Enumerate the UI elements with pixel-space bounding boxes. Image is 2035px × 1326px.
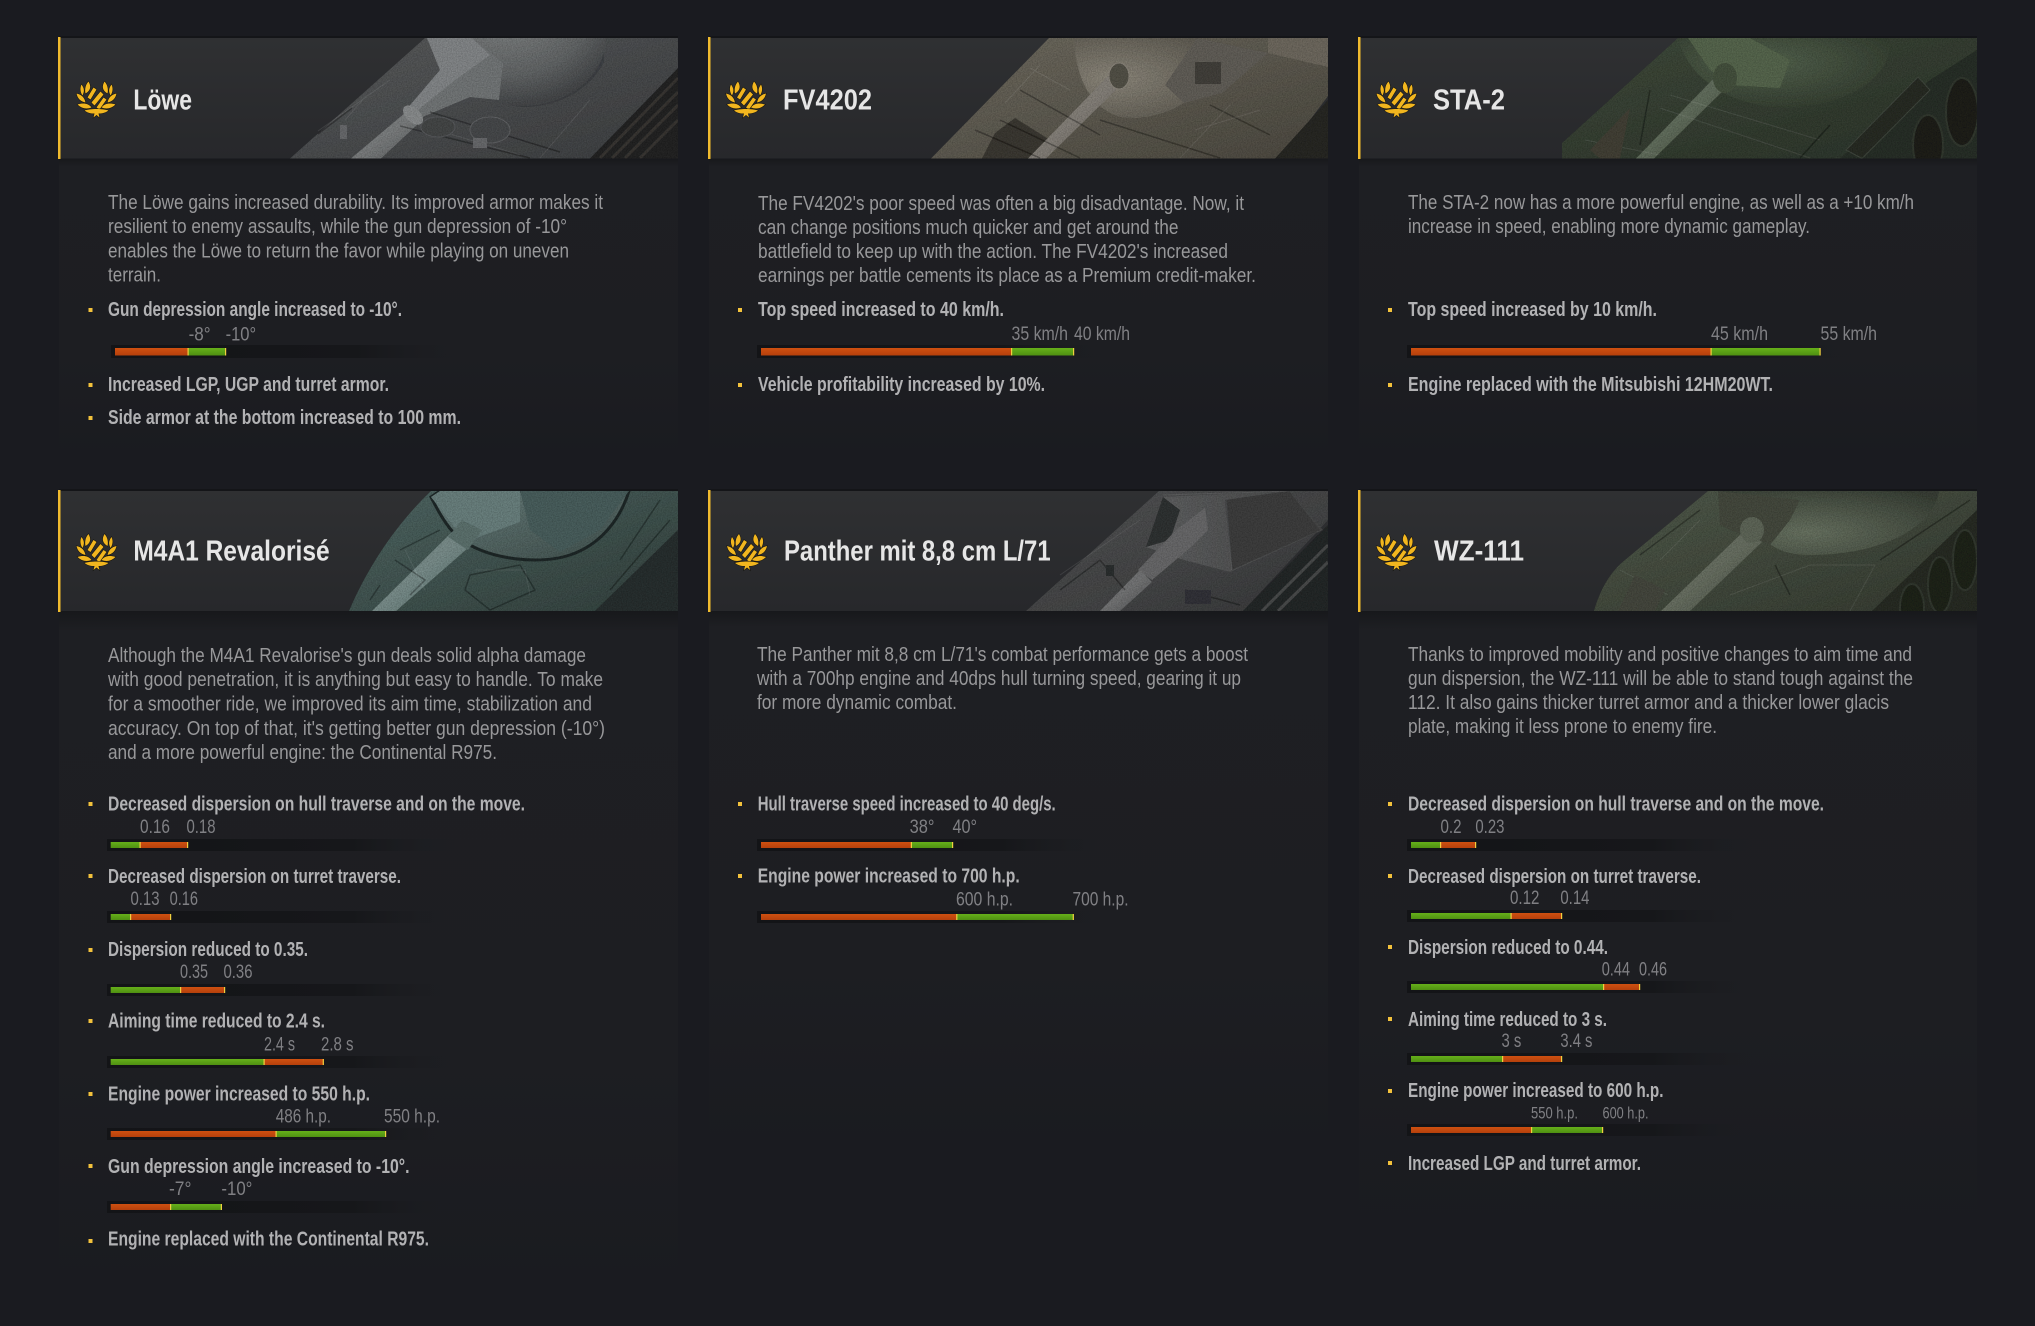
change: gun depression: -7° bbox=[169, 1179, 192, 1200]
change: hull traverse dispersion: Decreased dispersion on hull traverse and on the move. bbox=[108, 794, 525, 816]
change: gun depression: Gun depression angle increased to -10°. bbox=[108, 299, 402, 321]
icon: laurel bbox=[727, 534, 767, 570]
change: engine: Engine replaced with the Mitsubishi 12HM20WT. bbox=[1408, 374, 1773, 396]
description: battlefield to keep up with the action. The FV4202's increased bbox=[758, 241, 1228, 263]
change: turret traverse dispersion: Decreased dispersion on turret traverse. bbox=[108, 866, 401, 888]
description bbox=[756, 644, 1248, 714]
change: aiming time: Aiming time reduced to 2.4 s. bbox=[108, 1011, 325, 1033]
description: for more dynamic combat. bbox=[757, 692, 957, 714]
change: top speed: 35 km/h bbox=[1012, 324, 1068, 345]
image: WZ-111 tank bbox=[1594, 491, 1977, 611]
description bbox=[758, 193, 1256, 287]
change: engine power: Engine power increased to 550 h.p. bbox=[108, 1084, 370, 1106]
change: hull traverse dispersion bbox=[1388, 794, 1824, 851]
change: hull traverse dispersion: Decreased dispersion on hull traverse and on the move. bbox=[1408, 794, 1824, 816]
card header: WZ-111 bbox=[1358, 490, 1977, 612]
change: gun depression: -10° bbox=[226, 324, 256, 346]
image: Löwe tank bbox=[290, 38, 678, 158]
change: turret traverse dispersion: 0.16 bbox=[170, 889, 198, 910]
change: dispersion bbox=[88, 939, 457, 996]
change: dispersion: Dispersion reduced to 0.44. bbox=[1408, 937, 1608, 959]
change: hull traverse: 40° bbox=[952, 817, 977, 838]
change: engine power: 600 h.p. bbox=[1602, 1104, 1648, 1122]
change: gun depression: -10° bbox=[221, 1179, 252, 1200]
change: dispersion bbox=[1388, 937, 1757, 993]
description: earnings per battle cements its place as a Premium credit-maker. bbox=[758, 265, 1256, 287]
change: engine power: Engine power increased to 700 h.p. bbox=[758, 866, 1020, 888]
change: dispersion: 0.36 bbox=[224, 962, 252, 983]
icon: laurel bbox=[76, 82, 116, 118]
change: turret traverse dispersion: 0.12 bbox=[1510, 888, 1539, 909]
change: turret traverse dispersion: Decreased dispersion on turret traverse. bbox=[1408, 866, 1701, 888]
description: with good penetration, it is anything but easy to handle. To make bbox=[107, 669, 603, 691]
card header: STA-2 bbox=[1358, 37, 1977, 159]
change: engine power: 600 h.p. bbox=[956, 890, 1013, 911]
icon: laurel bbox=[1376, 534, 1416, 570]
change: engine power: Engine power increased to 600 h.p. bbox=[1408, 1080, 1664, 1102]
change: side armor: Side armor at the bottom increased to 100 mm. bbox=[108, 407, 461, 429]
panel: Panther mit 8,8 cm L/71 bbox=[708, 490, 1328, 923]
change: hull traverse: Hull traverse speed increased to 40 deg/s. bbox=[758, 794, 1056, 816]
image: Panther tank bbox=[1026, 491, 1328, 611]
description: 112. It also gains thicker turret armor and a thicker lower glacis bbox=[1408, 692, 1889, 714]
change: hull traverse dispersion bbox=[88, 794, 525, 851]
change: hull traverse dispersion: 0.16 bbox=[140, 817, 170, 838]
change: engine replaced: Engine replaced with the Continental R975. bbox=[108, 1229, 429, 1251]
description: The FV4202's poor speed was often a big disadvantage. Now, it bbox=[758, 193, 1244, 215]
description: with a 700hp engine and 40dps hull turning speed, gearing it up bbox=[756, 668, 1241, 690]
change: aiming time: Aiming time reduced to 3 s. bbox=[1408, 1009, 1607, 1031]
change: aiming time: 2.8 s bbox=[321, 1035, 354, 1056]
description: resilient to enemy assaults, while the gun depression of -10° bbox=[108, 216, 567, 238]
image: FV4202 tank bbox=[931, 38, 1328, 158]
card body background bbox=[59, 158, 678, 458]
change: turret traverse dispersion bbox=[88, 866, 457, 923]
change: armor: Increased LGP, UGP and turret armor. bbox=[108, 374, 389, 396]
description: The STA-2 now has a more powerful engine, as well as a +10 km/h bbox=[1408, 192, 1914, 214]
description bbox=[1408, 192, 1914, 238]
description: The Panther mit 8,8 cm L/71's combat performance gets a boost bbox=[757, 644, 1248, 666]
description: increase in speed, enabling more dynamic gameplay. bbox=[1408, 216, 1810, 238]
description: and a more powerful engine: the Continental R975. bbox=[108, 742, 497, 764]
change: turret traverse dispersion bbox=[1388, 866, 1757, 922]
change: hull traverse bbox=[738, 794, 1107, 851]
card header: Löwe bbox=[58, 37, 678, 159]
description: enables the Löwe to return the favor while playing on uneven bbox=[108, 240, 569, 262]
change: engine power: 550 h.p. bbox=[384, 1107, 440, 1128]
change: hull traverse dispersion: 0.23 bbox=[1475, 817, 1504, 838]
change: armor: Increased LGP and turret armor. bbox=[1408, 1153, 1641, 1175]
description bbox=[107, 645, 605, 764]
change: engine power: 550 h.p. bbox=[1531, 1104, 1578, 1122]
title: Panther mit 8,8 cm L/71 bbox=[784, 536, 1051, 568]
title: FV4202 bbox=[783, 84, 872, 116]
description bbox=[1408, 644, 1913, 738]
card body background bbox=[709, 611, 1328, 1151]
panel: Löwe bbox=[58, 37, 678, 424]
panel: WZ-111 bbox=[1358, 489, 1977, 1231]
change: dispersion: 0.35 bbox=[180, 962, 208, 983]
change: engine power bbox=[88, 1084, 457, 1140]
description: plate, making it less prone to enemy fire. bbox=[1408, 716, 1717, 738]
change: hull traverse: 38° bbox=[910, 817, 934, 838]
title: Löwe bbox=[133, 84, 192, 116]
change: aiming time: 3 s bbox=[1502, 1031, 1521, 1052]
description: can change positions much quicker and get around the bbox=[758, 217, 1178, 239]
panel: FV4202 bbox=[708, 37, 1328, 395]
card header: Panther bbox=[708, 489, 1328, 612]
change: turret traverse dispersion: 0.14 bbox=[1560, 888, 1590, 909]
description: The Löwe gains increased durability. Its improved armor makes it bbox=[108, 192, 603, 214]
change: top speed bbox=[738, 299, 1130, 358]
change: top speed: Top speed increased by 10 km/h. bbox=[1408, 299, 1657, 321]
change: dispersion: 0.44 bbox=[1602, 960, 1630, 981]
change: top speed bbox=[1388, 299, 1877, 358]
card body background bbox=[709, 158, 1328, 458]
change: aiming time bbox=[1388, 1009, 1757, 1065]
title: M4A1 Revalorisé bbox=[133, 536, 330, 568]
change: aiming time: 2.4 s bbox=[264, 1035, 295, 1056]
change: aiming time bbox=[88, 1011, 457, 1068]
panel: M4A1 Revalorisé bbox=[58, 489, 678, 1291]
icon: laurel bbox=[726, 82, 766, 118]
title: WZ-111 bbox=[1434, 536, 1524, 568]
change: hull traverse dispersion: 0.18 bbox=[186, 817, 216, 838]
image: M4A1 tank bbox=[349, 491, 678, 611]
description bbox=[108, 192, 603, 286]
change: top speed: Top speed increased to 40 km/h. bbox=[758, 299, 1004, 321]
card header: FV4202 bbox=[708, 36, 1328, 159]
change: dispersion: Dispersion reduced to 0.35. bbox=[108, 939, 308, 961]
description: Although the M4A1 Revalorise's gun deals solid alpha damage bbox=[108, 645, 586, 667]
title: STA-2 bbox=[1433, 84, 1505, 116]
card body background bbox=[59, 611, 678, 1291]
change: gun depression: -8° bbox=[189, 324, 211, 346]
change: top speed: 55 km/h bbox=[1820, 324, 1877, 345]
change: turret traverse dispersion: 0.13 bbox=[130, 889, 160, 910]
description: accuracy. On top of that, it's getting better gun depression (-10°) bbox=[108, 718, 605, 740]
change: dispersion: 0.46 bbox=[1639, 960, 1667, 981]
change: engine power: 700 h.p. bbox=[1072, 890, 1128, 911]
icon: laurel bbox=[1376, 82, 1416, 118]
change: engine power bbox=[1388, 1080, 1757, 1136]
panel: STA-2 bbox=[1358, 37, 1977, 395]
description: for a smoother ride, we improved its aim time, stabilization and bbox=[108, 694, 592, 716]
card body background bbox=[1359, 158, 1977, 458]
description: terrain. bbox=[108, 264, 161, 286]
card header: M4A1 Revalorisé bbox=[58, 489, 678, 612]
change: hull traverse dispersion: 0.2 bbox=[1440, 817, 1462, 838]
image: STA-2 tank bbox=[1562, 38, 1977, 158]
change: top speed: 45 km/h bbox=[1711, 324, 1768, 345]
change: engine power: 486 h.p. bbox=[276, 1107, 331, 1128]
description: Thanks to improved mobility and positive changes to aim time and bbox=[1408, 644, 1912, 666]
change: gun depression bbox=[88, 299, 461, 358]
card body background bbox=[1359, 611, 1977, 1231]
change: gun depression: Gun depression angle increased to -10°. bbox=[108, 1156, 410, 1178]
change: top speed: 40 km/h bbox=[1074, 324, 1130, 345]
change: aiming time: 3.4 s bbox=[1560, 1031, 1592, 1052]
change: gun depression bbox=[88, 1156, 457, 1213]
change: engine power bbox=[738, 866, 1128, 923]
change: profitability: Vehicle profitability increased by 10%. bbox=[758, 374, 1045, 396]
description: gun dispersion, the WZ-111 will be able to stand tough against the bbox=[1408, 668, 1913, 690]
icon: laurel bbox=[76, 534, 116, 570]
